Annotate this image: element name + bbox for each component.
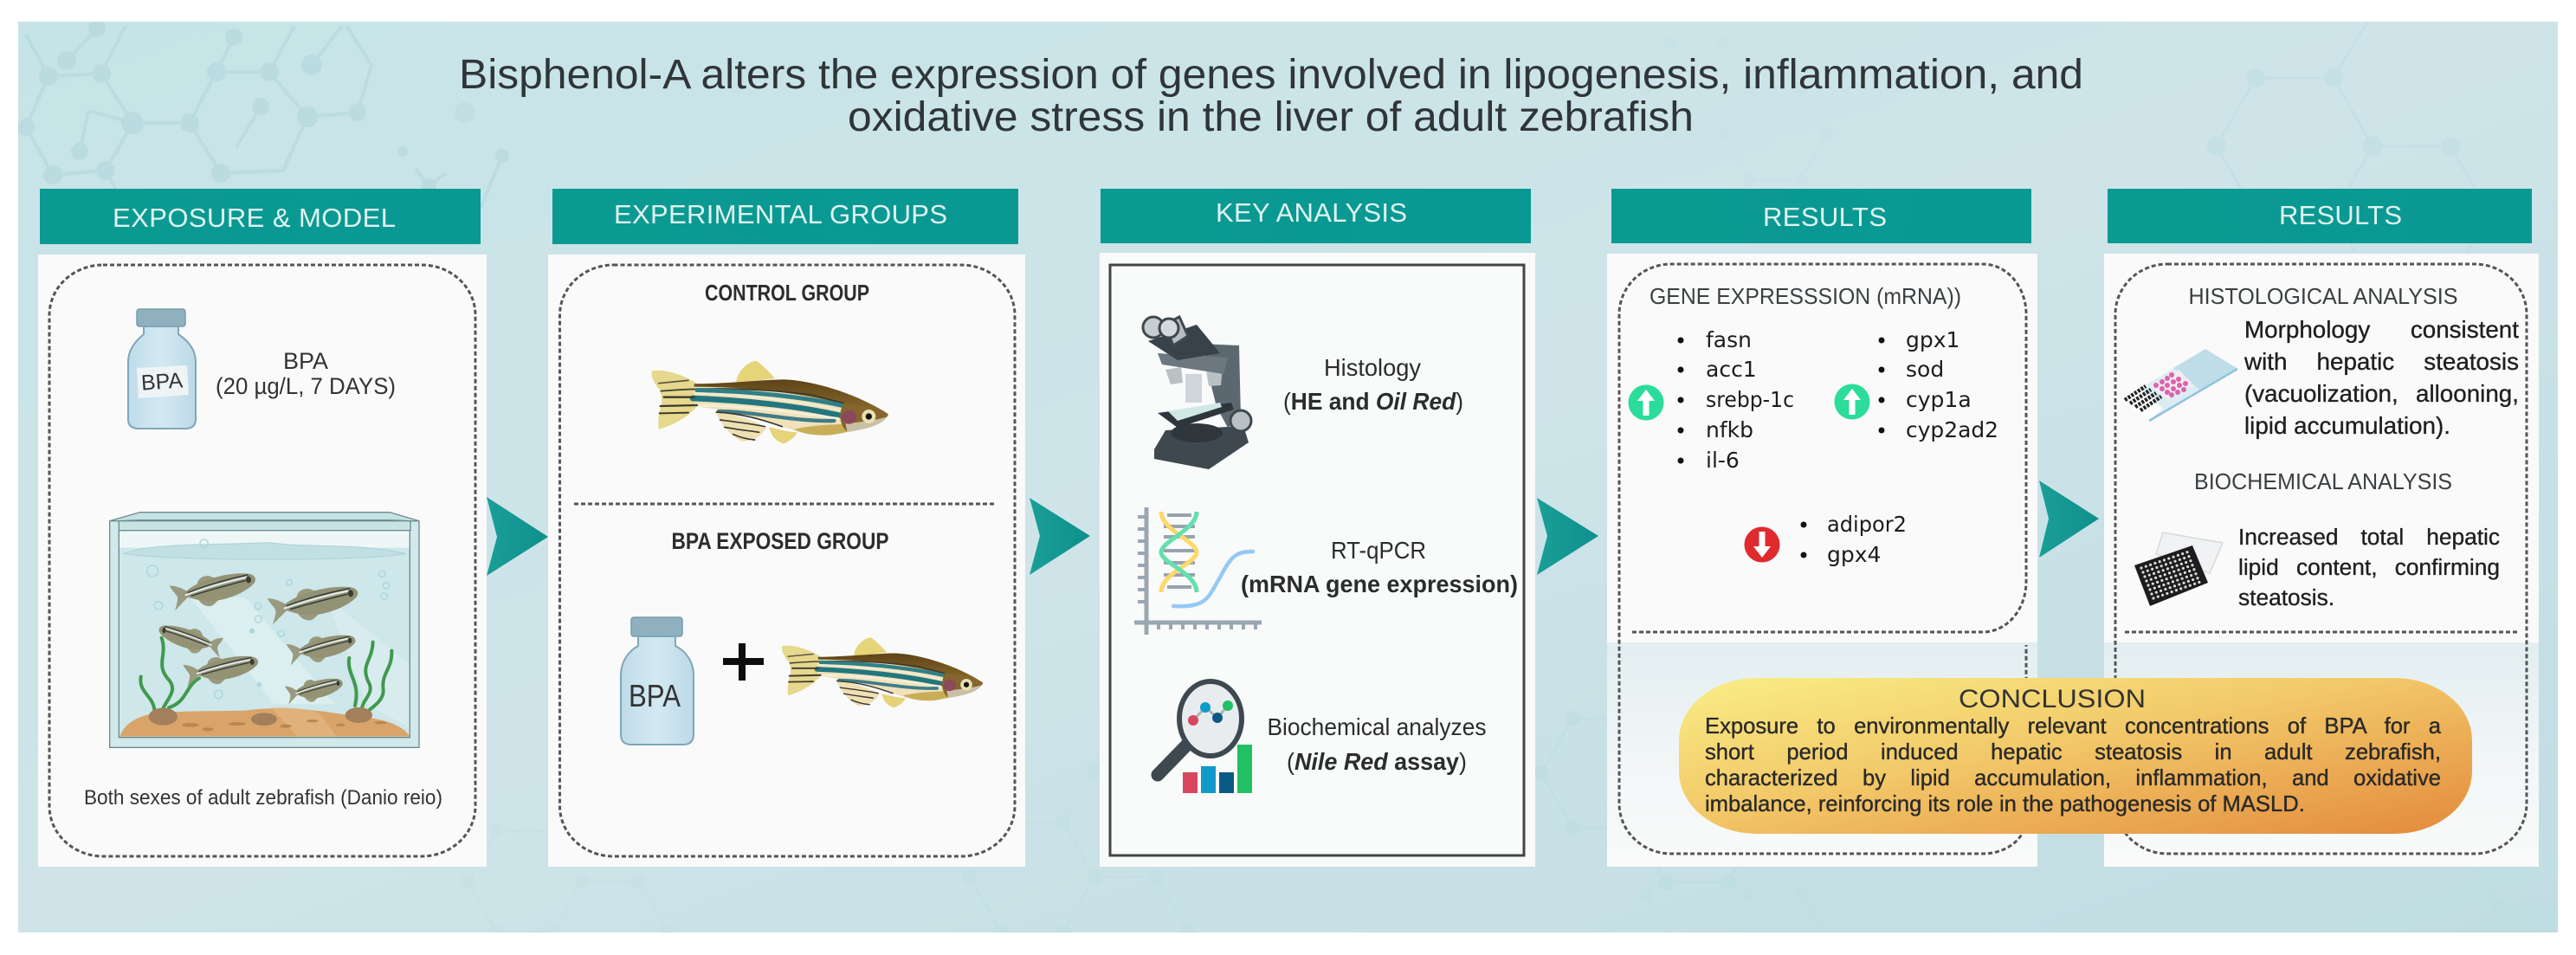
heading: experimental groups: EXPERIMENTAL GROUPS <box>614 199 947 229</box>
panel: experimental groups <box>548 189 1025 867</box>
text: biochemical analyzes <box>1268 713 1486 775</box>
heading: key analysis: KEY ANALYSIS <box>1216 197 1407 228</box>
text: BPA dose <box>216 348 396 399</box>
arrow: groups to analysis <box>1030 498 1090 575</box>
list: upregulated genes right: gpx1 <box>1906 327 1959 352</box>
list: upregulated genes left: acc1 <box>1706 357 1757 382</box>
panel: results histology and biochemistry <box>2104 189 2539 867</box>
heading: exposure and model: EXPOSURE & MODEL <box>113 203 396 233</box>
heading: experimental groups <box>552 189 1018 244</box>
callout: conclusion: Exposure to environmentally relevant concentrations of BPA for a <box>1705 714 2441 739</box>
panel: key analysis <box>1100 189 1535 867</box>
panel: results gene expression <box>1607 189 2037 867</box>
heading: key analysis <box>1101 189 1531 243</box>
icon: exposed zebrafish <box>782 637 983 707</box>
heading: results second: RESULTS <box>2279 200 2402 230</box>
callout: conclusion <box>1679 678 2472 834</box>
text: RT-qPCR: RT-qPCR <box>1331 537 1426 564</box>
arrow: results to results <box>2039 481 2099 558</box>
text: biochemical finding: lipid content, confirming <box>2238 554 2500 580</box>
caption: zebrafish: Both sexes of adult zebrafish (Danio reio) <box>84 786 442 810</box>
text: RT-qPCR: (mRNA gene expression) <box>1241 571 1518 597</box>
title: oxidative stress in the liver of adult zebrafish <box>848 94 1694 140</box>
text: BPA dose: BPA <box>283 348 328 374</box>
text: RT-qPCR <box>1241 537 1518 597</box>
text: biochemical finding <box>2238 522 2502 619</box>
icon: BPA bottle large <box>621 617 694 745</box>
icon: microscope <box>1143 317 1251 469</box>
subheading: gene expression: GENE EXPRESSSION (mRNA)) <box>1650 283 1961 309</box>
fish school <box>158 569 360 705</box>
arrow: exposure to groups <box>487 497 548 576</box>
illustration: aquarium with zebrafish <box>110 513 419 747</box>
panel: exposure and model <box>38 189 487 867</box>
subheading: biochemical analysis: BIOCHEMICAL ANALYSIS <box>2194 468 2452 494</box>
list: upregulated genes left: il-6 <box>1706 448 1740 473</box>
text: morphology finding: Morphology consistent <box>2244 316 2519 343</box>
icon: histology slide <box>2120 349 2237 421</box>
text: BPA dose: (20 µg/L, 7 DAYS) <box>216 373 396 399</box>
list: upregulated genes left: fasn <box>1706 327 1752 352</box>
list: downregulated genes <box>1801 512 1907 567</box>
text: morphology finding <box>2244 313 2521 443</box>
list: upregulated genes right <box>1879 327 1998 442</box>
subheading: histological analysis: HISTOLOGICAL ANALYSIS <box>2189 283 2457 309</box>
icon: down arrow <box>1744 526 1780 563</box>
icon: magnifier and bars <box>1158 681 1252 793</box>
list: upregulated genes left <box>1678 327 1794 473</box>
list: upregulated genes right: cyp1a <box>1906 387 1972 412</box>
text: histology <box>1283 354 1463 415</box>
text: biochemical analyzes: Biochemical analyzes <box>1268 713 1486 740</box>
arrow: analysis to results <box>1537 498 1598 575</box>
list: upregulated genes left: nfkb <box>1706 417 1753 442</box>
icon: DNA and qPCR curve <box>1134 507 1262 635</box>
icon: BPA bottle: BPA <box>140 368 184 396</box>
text: histology: Histology <box>1324 354 1421 381</box>
callout: conclusion: characterized by lipid accumulation, inflammation, and oxidative <box>1705 766 2441 790</box>
text: biochemical analyzes: (Nile Red assay) <box>1287 748 1467 775</box>
callout: conclusion: CONCLUSION <box>1959 685 2146 713</box>
list: downregulated genes: gpx4 <box>1827 542 1881 567</box>
callout: conclusion: imbalance, reinforcing its role in the pathogenesis of MASLD. <box>1705 792 2305 816</box>
icon: up arrow left <box>1628 384 1664 421</box>
icon: up arrow right <box>1834 384 1870 419</box>
list: downregulated genes: adipor2 <box>1827 512 1907 537</box>
callout: conclusion: short period induced hepatic steatosis in adult zebrafish, <box>1705 740 2441 765</box>
text: morphology finding: lipid accumulation). <box>2244 412 2450 439</box>
title: Bisphenol-A alters the expression of genes involved in lipogenesis, inflammation, and <box>459 52 2083 98</box>
text: morphology finding: with hepatic steatosis <box>2244 348 2519 375</box>
text: biochemical finding: Increased total hepatic <box>2238 524 2500 550</box>
icon: BPA bottle large: BPA <box>629 678 681 713</box>
icon: control zebrafish <box>652 361 888 443</box>
list: upregulated genes left: srebp-1c <box>1706 387 1794 412</box>
list: upregulated genes right: sod <box>1906 357 1944 382</box>
icon: microplate <box>2134 532 2223 606</box>
text: histology: (HE and Oil Red) <box>1283 388 1463 415</box>
heading: results: RESULTS <box>1763 202 1887 232</box>
label: BPA exposed group: BPA EXPOSED GROUP <box>672 528 888 554</box>
title <box>459 52 2083 140</box>
label: control group: CONTROL GROUP <box>705 280 869 306</box>
text: biochemical finding: steatosis. <box>2238 584 2334 610</box>
heading: exposure and model <box>40 189 481 244</box>
list: upregulated genes right: cyp2ad2 <box>1906 417 1998 442</box>
heading: results second <box>2108 189 2532 243</box>
icon: plus sign <box>723 643 764 681</box>
icon: BPA bottle <box>128 309 196 429</box>
heading: results <box>1611 189 2031 243</box>
text: morphology finding: (vacuolization, allooning, <box>2244 380 2519 407</box>
